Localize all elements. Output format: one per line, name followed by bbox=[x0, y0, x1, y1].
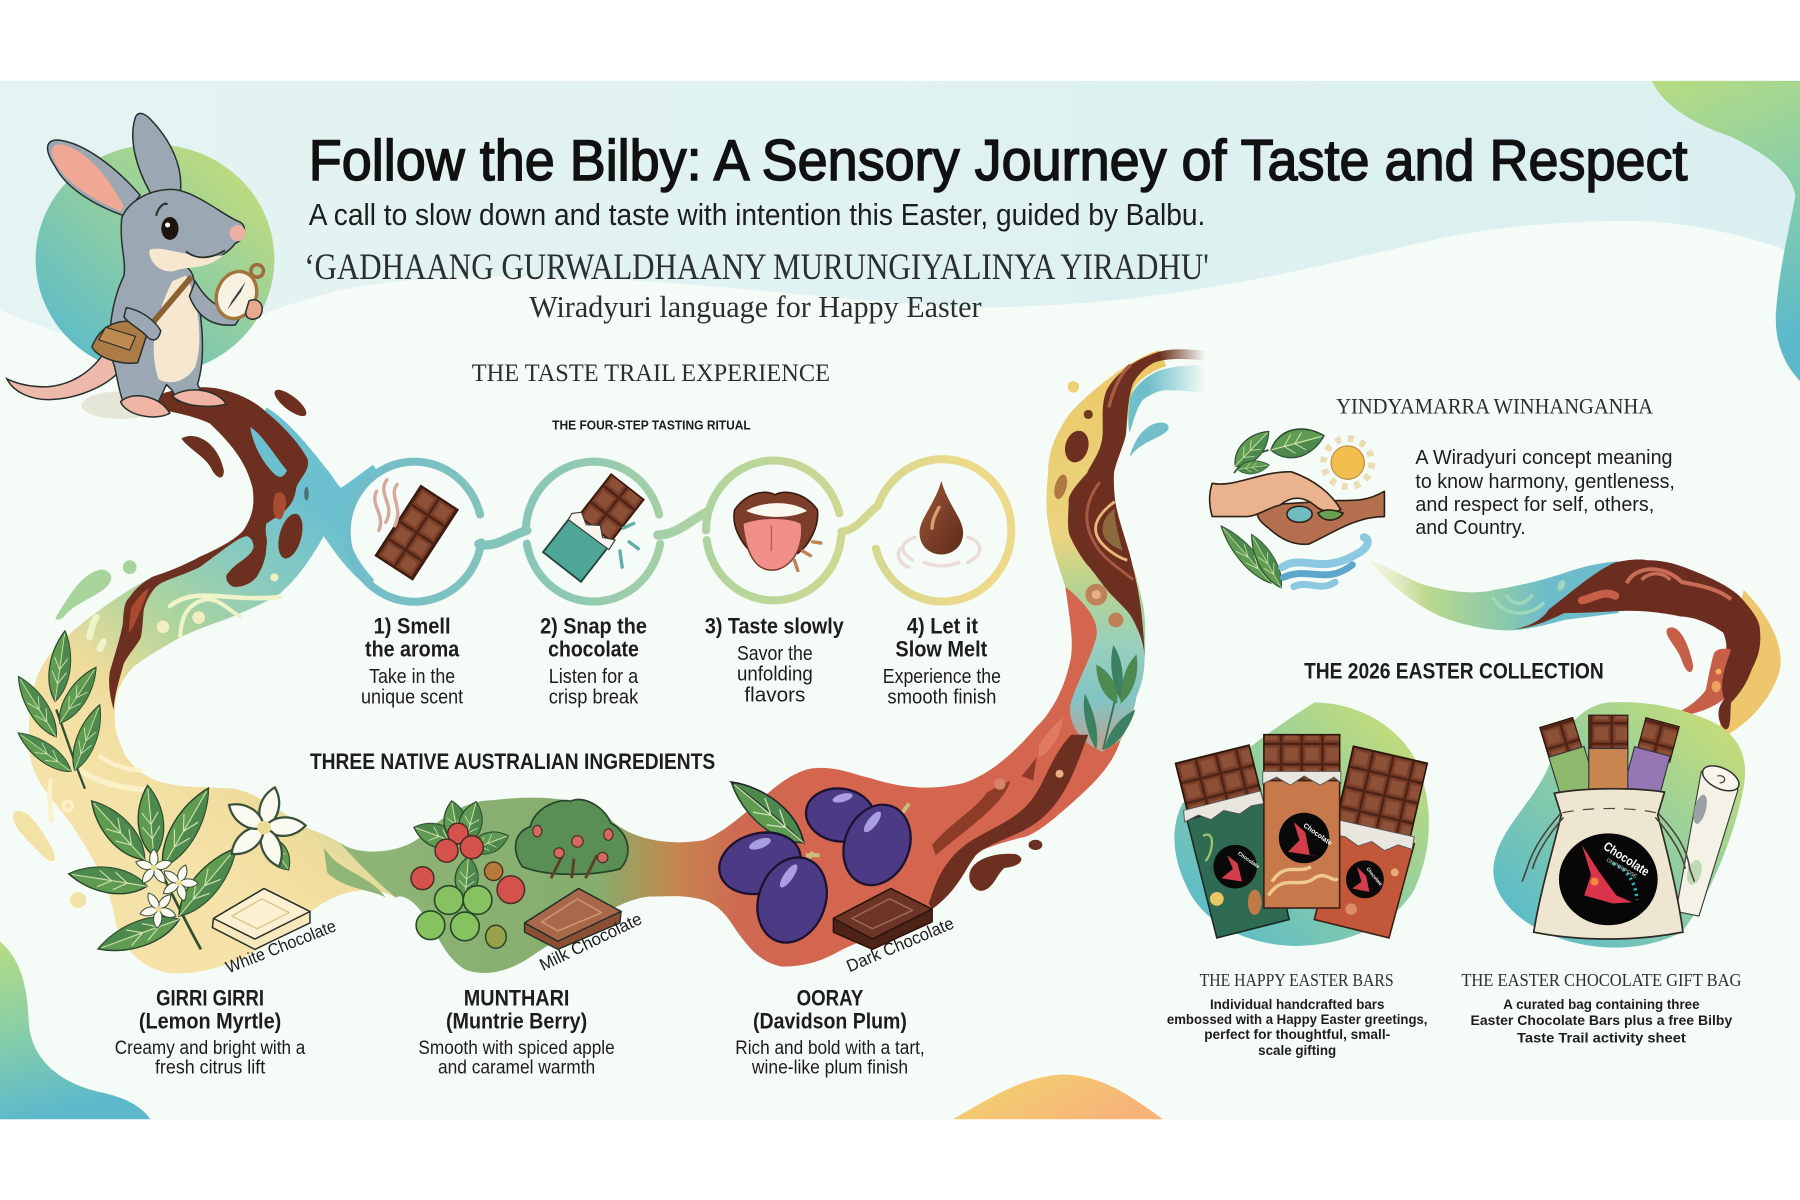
trail: winding ribbon bbox=[13, 349, 1205, 973]
bars caption bbox=[1167, 970, 1427, 1058]
bag logo: Chocolate bbox=[1601, 839, 1652, 879]
gift bag caption: THE EASTER CHOCOLATE GIFT BAG bbox=[1461, 970, 1742, 990]
step 2 text: 2) Snap the bbox=[540, 614, 647, 639]
background: sky wave bbox=[0, 81, 1800, 349]
arm bbox=[124, 281, 243, 340]
drawstring bag bbox=[1534, 789, 1683, 939]
icon: melting drop bbox=[898, 481, 980, 567]
yindyamarra text: and respect for self, others, bbox=[1415, 493, 1654, 516]
girri girri text bbox=[115, 986, 305, 1078]
icon: compass bbox=[209, 265, 264, 325]
step 4 text: smooth finish bbox=[887, 687, 996, 709]
logo text: Chocolate bbox=[1365, 866, 1384, 887]
panel: happy easter bars bbox=[1174, 703, 1429, 946]
ribbon: brown body bbox=[1515, 560, 1760, 729]
munthari text: and caramel warmth bbox=[438, 1056, 595, 1078]
bars caption: scale gifting bbox=[1258, 1043, 1336, 1058]
body bbox=[110, 189, 245, 404]
bars caption: Individual handcrafted bars bbox=[1210, 997, 1385, 1012]
trail: green and yellow splashes bbox=[13, 560, 137, 908]
ears bbox=[48, 113, 181, 216]
bars caption: perfect for thoughtful, small- bbox=[1204, 1027, 1391, 1042]
icon: dark chocolate block bbox=[833, 889, 932, 949]
label: white chocolate: White Chocolate bbox=[223, 915, 339, 977]
ribbon: red lobe bbox=[1669, 649, 1731, 716]
trail: left ribbon blue to yellow bbox=[29, 408, 396, 973]
small bars in bag bbox=[1540, 715, 1679, 801]
drips bbox=[271, 385, 310, 420]
step 3 text: flavors bbox=[744, 684, 805, 706]
step 3 text: 3) Taste slowly bbox=[705, 614, 844, 639]
greeting translation: Wiradyuri language for Happy Easter bbox=[529, 289, 982, 324]
ribbon: concentric marks on blue bbox=[1492, 595, 1544, 613]
logo birds bbox=[1221, 822, 1376, 893]
right ribbon bbox=[1370, 560, 1781, 740]
wiradyuri greeting: ‘GADHAANG GURWALDHAANY MURUNGIYALINYA YIRADHU' bbox=[304, 246, 1209, 287]
munthari text: (Muntrie Berry) bbox=[446, 1009, 587, 1034]
step 1 text: 1) Smell bbox=[374, 614, 451, 639]
heading: four-step ritual: THE FOUR-STEP TASTING RITUAL bbox=[552, 417, 751, 432]
gift bag caption bbox=[1461, 970, 1742, 1045]
tail bbox=[7, 350, 121, 400]
trail: brown band on right ribbon bbox=[1068, 349, 1205, 660]
connector 1 to 2 bbox=[479, 530, 527, 545]
icon: lips and tongue bbox=[734, 492, 821, 571]
icon: muntries bush bbox=[516, 800, 628, 878]
logo text: Chocolate bbox=[1236, 851, 1260, 870]
icon: lower leaves bbox=[1215, 521, 1288, 592]
step 3 text bbox=[705, 614, 844, 706]
ribbon: droplets bbox=[1667, 627, 1693, 672]
bars blob bbox=[1174, 703, 1429, 946]
corner blob bottom left bbox=[0, 941, 150, 1119]
bar 1 green bbox=[1176, 745, 1289, 938]
ring 2 bbox=[526, 462, 660, 602]
trail: patterns in brown band bbox=[1087, 365, 1133, 580]
icon: leaf sprig left bbox=[10, 629, 109, 789]
step 4 text: Slow Melt bbox=[895, 637, 987, 662]
trail: mid band green to red bbox=[340, 587, 1120, 973]
feet bbox=[121, 390, 226, 417]
gift bag caption: Easter Chocolate Bars plus a free Bilby bbox=[1471, 1013, 1733, 1028]
trail: green swoosh on yellow bbox=[324, 847, 386, 898]
trail: brown swoosh under bilby bbox=[109, 387, 308, 709]
ooray text: OORAY bbox=[797, 986, 864, 1011]
connector 2 to 3 bbox=[658, 512, 707, 535]
munthari text bbox=[418, 986, 615, 1078]
ooray text: Rich and bold with a tart, bbox=[735, 1037, 925, 1059]
logo stickers bbox=[1213, 813, 1384, 898]
step 3 text: unfolding bbox=[737, 664, 813, 686]
satchel bag bbox=[92, 277, 192, 363]
step 1 text: Take in the bbox=[369, 666, 455, 688]
trail: blue band on right ribbon bbox=[1128, 365, 1205, 433]
label: milk chocolate: Milk Chocolate bbox=[536, 908, 645, 975]
ribbon: yellow outer band bbox=[1720, 590, 1781, 735]
ribbon: curls bbox=[1582, 569, 1731, 600]
icon: bilby mascot bbox=[7, 113, 274, 419]
scroll activity sheet bbox=[1676, 761, 1743, 916]
icon: milk chocolate block bbox=[525, 889, 621, 949]
yindyamarra text: and Country. bbox=[1415, 516, 1526, 539]
icon: sun bbox=[1324, 439, 1372, 487]
bag logo: ON PURPOSE bbox=[1605, 858, 1638, 880]
connector 3 to 4 bbox=[841, 506, 877, 532]
subtitle: A call to slow down and taste with intention this Easter, guided by Balbu. bbox=[309, 198, 1205, 232]
icon: white chocolate block bbox=[212, 889, 310, 949]
icon: smell bar bbox=[375, 480, 458, 579]
corner blob bottom centre bbox=[953, 1074, 1163, 1119]
heading: taste trail: THE TASTE TRAIL EXPERIENCE bbox=[472, 359, 830, 387]
icon: davidson plums bbox=[712, 771, 922, 952]
icon: hands harmony bbox=[1210, 423, 1384, 592]
yindyamarra text bbox=[1415, 446, 1675, 539]
step 1 text: unique scent bbox=[361, 687, 464, 709]
step 4 text bbox=[883, 614, 1001, 709]
steps ribbon bbox=[347, 459, 1011, 602]
step 2 text: Listen for a bbox=[549, 666, 639, 688]
step 2 text bbox=[540, 614, 647, 709]
step 1 text: the aroma bbox=[365, 637, 460, 662]
girri girri text: Creamy and bright with a bbox=[115, 1037, 305, 1059]
corner blob top right bbox=[1652, 81, 1800, 381]
step 2 text: chocolate bbox=[548, 637, 639, 662]
bars caption: THE HAPPY EASTER BARS bbox=[1200, 970, 1394, 990]
ring 4 bbox=[876, 459, 1011, 602]
bars caption: embossed with a Happy Easter greetings, bbox=[1167, 1012, 1427, 1027]
icon: lemon myrtle bbox=[67, 776, 316, 961]
ooray text: (Davidson Plum) bbox=[753, 1009, 907, 1034]
girri girri text: (Lemon Myrtle) bbox=[139, 1009, 281, 1034]
bag blob bbox=[1493, 702, 1745, 948]
step 1 text bbox=[361, 614, 464, 709]
girri girri text: fresh citrus lift bbox=[155, 1056, 266, 1078]
yindyamarra text: to know harmony, gentleness, bbox=[1415, 470, 1675, 493]
bag strings bbox=[1522, 813, 1694, 882]
title: Follow the Bilby: A Sensory Journey of Taste and Respect bbox=[309, 129, 1688, 193]
icon: top leaves bbox=[1228, 423, 1328, 476]
bag logo bbox=[1559, 833, 1658, 925]
step 2 text: crisp break bbox=[549, 687, 639, 709]
face bbox=[156, 204, 246, 257]
heading: three ingredients: THREE NATIVE AUSTRALIAN INGREDIENTS bbox=[310, 749, 715, 774]
logo text bbox=[1236, 822, 1384, 887]
splatter near dark chocolate bbox=[969, 854, 1021, 891]
trail: leaf sprig on ribbon bbox=[1084, 645, 1137, 750]
icon: muntries bbox=[410, 799, 525, 948]
yindyamarra text: A Wiradyuri concept meaning bbox=[1415, 446, 1673, 469]
munthari text: MUNTHARI bbox=[464, 986, 569, 1011]
bilby shadow bbox=[82, 391, 160, 419]
bar 2 orange bbox=[1263, 735, 1341, 908]
bar 3 red bbox=[1314, 746, 1427, 938]
ring 1 bbox=[347, 462, 481, 602]
step 4 text: Experience the bbox=[883, 666, 1001, 688]
trail: red brown stream bbox=[929, 735, 1088, 909]
icon: clasped hands bbox=[1210, 472, 1384, 544]
ooray text bbox=[735, 986, 925, 1078]
girri girri text: GIRRI GIRRI bbox=[156, 986, 264, 1011]
panel: gift bag bbox=[1493, 702, 1745, 948]
ring 3 bbox=[706, 461, 841, 600]
step 3 text: Savor the bbox=[737, 643, 813, 665]
icon: green circle behind bilby bbox=[36, 145, 274, 374]
belly and cheek bbox=[149, 249, 224, 382]
trail: right ribbon base bbox=[1046, 350, 1166, 758]
gift bag caption: Taste Trail activity sheet bbox=[1517, 1030, 1686, 1045]
gift bag caption: A curated bag containing three bbox=[1503, 997, 1700, 1012]
trail: cream swirl marks bbox=[50, 596, 280, 821]
icon: water wave bbox=[1282, 537, 1368, 587]
trail: spots on ribbon bbox=[1052, 381, 1123, 627]
label: dark chocolate: Dark Chocolate bbox=[843, 913, 957, 976]
icon: snap bar bbox=[542, 470, 646, 583]
logo text: Chocolate bbox=[1302, 822, 1333, 847]
ribbon: gradient body bbox=[1370, 560, 1619, 630]
heading: yindyamarra: YINDYAMARRA WINHANGANHA bbox=[1336, 394, 1653, 418]
munthari text: Smooth with spiced apple bbox=[418, 1037, 615, 1059]
step 4 text: 4) Let it bbox=[907, 614, 978, 639]
heading: easter collection: THE 2026 EASTER COLLECTION bbox=[1304, 658, 1604, 683]
ooray text: wine-like plum finish bbox=[751, 1056, 908, 1078]
trail: blue streak and red highlights bbox=[129, 427, 309, 634]
